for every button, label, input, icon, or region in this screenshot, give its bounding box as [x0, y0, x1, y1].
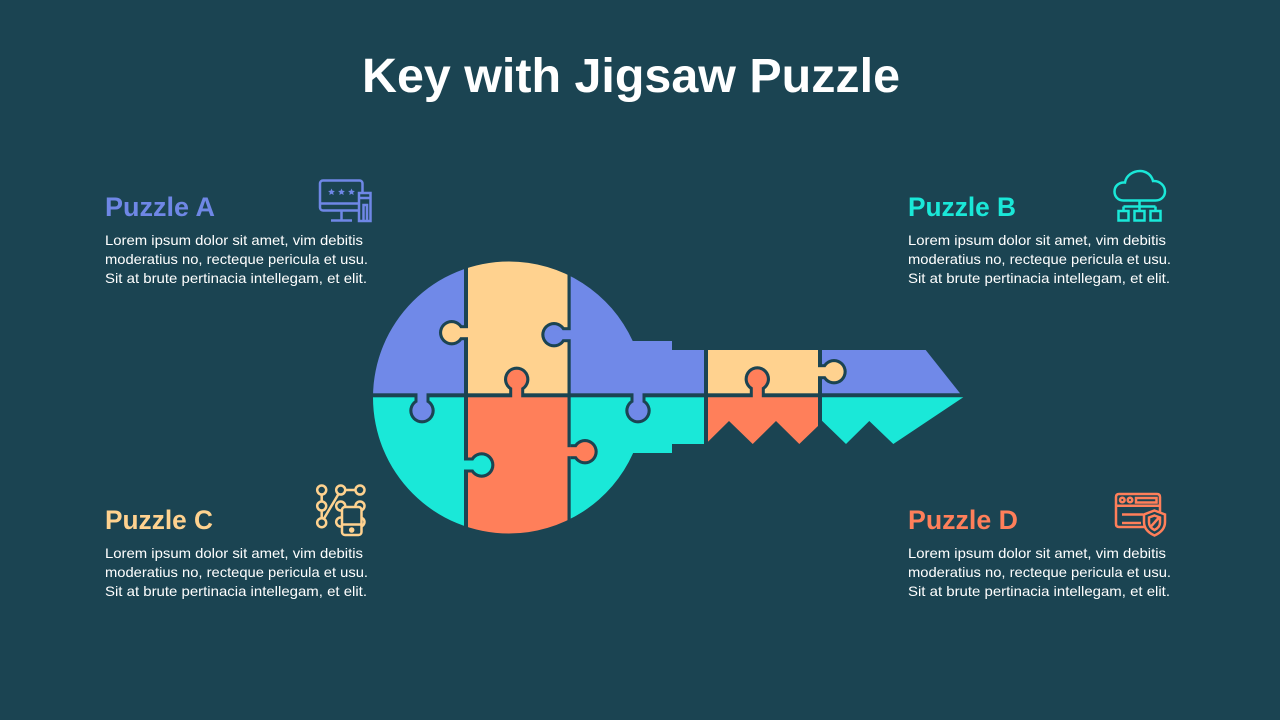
piece: head upper right and shaft, blue — [570, 276, 704, 394]
piece: head lower left, teal — [373, 397, 464, 534]
tab: orange into yellow blade — [745, 366, 770, 398]
icon: computer with password — [320, 180, 370, 221]
tab: blue into yellow — [541, 322, 571, 347]
heading: Puzzle A: Puzzle A — [105, 192, 215, 222]
piece: head upper left, blue — [373, 261, 464, 393]
text block: Puzzle C body — [105, 545, 368, 599]
panel: Puzzle C — [105, 486, 368, 599]
piece: head upper middle, yellow — [468, 261, 568, 393]
text block: Puzzle B body — [908, 232, 1171, 286]
key made of jigsaw pieces — [373, 261, 963, 534]
heading: Puzzle B: Puzzle B — [908, 192, 1016, 222]
text block: Puzzle D body: Sit at brute pertinacia intellegam, et elit. — [908, 583, 1170, 599]
text block: Puzzle A body: Lorem ipsum dolor sit amet, vim debitis — [105, 232, 363, 248]
tab: orange into yellow — [504, 367, 529, 398]
text block: Puzzle C body: moderatius no, recteque pericula et usu. — [105, 564, 368, 580]
text block: Puzzle C body: Sit at brute pertinacia intellegam, et elit. — [105, 583, 367, 599]
tab: orange into teal right — [567, 439, 598, 464]
title: Key with Jigsaw Puzzle — [362, 50, 900, 103]
text block: Puzzle B body: Lorem ipsum dolor sit amet, vim debitis — [908, 232, 1166, 248]
tab: blue into teal right — [625, 393, 651, 423]
panel: Puzzle B — [908, 171, 1171, 286]
panel: Puzzle D — [908, 494, 1171, 599]
icon: cloud network — [1114, 171, 1165, 220]
tab: blue into teal left — [409, 393, 435, 423]
heading: Puzzle D: Puzzle D — [908, 505, 1018, 535]
piece: blade upper, yellow — [708, 350, 818, 393]
text block: Puzzle A body: Sit at brute pertinacia intellegam, et elit. — [105, 270, 367, 286]
tab: yellow into blue tip — [818, 359, 847, 384]
text block: Puzzle D body: Lorem ipsum dolor sit amet, vim debitis — [908, 545, 1166, 561]
tab: yellow into blue — [439, 320, 468, 345]
text block: Puzzle C body: Lorem ipsum dolor sit amet, vim debitis — [105, 545, 363, 561]
icon: phone with pattern lock — [317, 486, 364, 535]
text block: Puzzle A body — [105, 232, 368, 286]
piece: key tip upper, blue — [822, 350, 960, 393]
text block: Puzzle B body: moderatius no, recteque pericula et usu. — [908, 251, 1171, 267]
text block: Puzzle B body: Sit at brute pertinacia intellegam, et elit. — [908, 270, 1170, 286]
piece: blade lower with teeth, orange — [708, 397, 818, 444]
panel: Puzzle A — [105, 180, 370, 286]
piece: head lower middle, orange — [468, 397, 568, 534]
piece: key tip lower, teal — [822, 397, 963, 444]
text block: Puzzle A body: moderatius no, recteque pericula et usu. — [105, 251, 368, 267]
tab: teal into orange — [464, 452, 494, 478]
piece: head lower right and shaft, teal — [570, 397, 704, 519]
text block: Puzzle D body — [908, 545, 1171, 599]
icon: browser window with shield — [1116, 494, 1165, 536]
heading: Puzzle C: Puzzle C — [105, 505, 213, 535]
text block: Puzzle D body: moderatius no, recteque pericula et usu. — [908, 564, 1171, 580]
